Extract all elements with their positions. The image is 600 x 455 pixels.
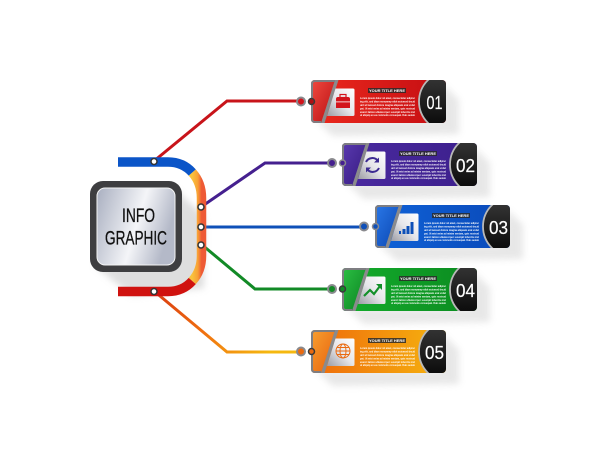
card 02 xyxy=(327,143,491,200)
shadow xyxy=(315,84,459,136)
body text: pat. Ut wisi enim ad minim veniam, quis nostrud xyxy=(424,232,479,236)
number: 04 xyxy=(456,280,475,301)
body text: exerci tation ullamcorper suscipit lobortis nisl xyxy=(424,235,479,239)
hub title: INFO xyxy=(122,206,155,227)
hub face xyxy=(97,188,175,265)
body text: ut aliquip ex ea commodo consequat. Duis autem xyxy=(360,363,415,367)
hub frame xyxy=(90,181,182,272)
connector nodes xyxy=(328,159,346,167)
number: 02 xyxy=(456,155,475,176)
card 01 xyxy=(296,80,460,137)
card body xyxy=(342,143,477,186)
connector nodes xyxy=(328,285,346,293)
card 03 xyxy=(359,205,524,262)
body text xyxy=(360,346,415,367)
icon: globe xyxy=(336,344,350,358)
body text xyxy=(391,284,446,305)
body text: pat. Ut wisi enim ad minim veniam, quis nostrud xyxy=(360,106,415,110)
shadow xyxy=(379,209,523,261)
body text: Lorem ipsum dolor sit amet, consectetur adipisc xyxy=(424,221,479,225)
shadow xyxy=(346,147,490,199)
body text: ut aliquip ex ea commodo consequat. Duis autem xyxy=(391,301,446,305)
body text: ing elit, sed diam nonummy nibh euismod tincid xyxy=(360,100,415,104)
body text: Lorem ipsum dolor sit amet, consectetur adipisc xyxy=(391,159,446,163)
body text: unt ut laoreet dolore magna aliquam erat volut xyxy=(360,103,415,107)
card 05 xyxy=(296,330,460,387)
connector lines xyxy=(154,101,364,352)
body text xyxy=(360,96,415,117)
icon: bar chart xyxy=(399,222,414,234)
shadow xyxy=(346,272,490,324)
body text xyxy=(391,159,446,180)
title pill: YOUR TITLE HERE xyxy=(369,338,405,343)
icon panel xyxy=(358,152,386,179)
connector nodes xyxy=(297,348,314,356)
icon panel xyxy=(327,338,354,366)
central hub: GRAPHIC xyxy=(105,228,167,250)
title pill: YOUR TITLE HERE xyxy=(433,213,469,218)
title pill: YOUR TITLE HERE xyxy=(400,276,436,281)
number: 01 xyxy=(426,92,442,113)
card body xyxy=(375,205,510,248)
arc: red segment xyxy=(118,281,192,292)
card body xyxy=(342,268,477,311)
body text: unt ut laoreet dolore magna aliquam erat volut xyxy=(391,291,446,295)
body text: pat. Ut wisi enim ad minim veniam, quis nostrud xyxy=(391,170,446,174)
hub shadow xyxy=(95,190,204,296)
body text: Lorem ipsum dolor sit amet, consectetur adipisc xyxy=(391,284,446,288)
connector nodes xyxy=(297,98,314,106)
number: 05 xyxy=(425,342,444,363)
card body xyxy=(311,80,446,123)
icon: refresh arrows xyxy=(366,158,379,172)
title pill: YOUR TITLE HERE xyxy=(369,88,405,93)
connector nodes xyxy=(360,222,378,230)
body text: Lorem ipsum dolor sit amet, consectetur adipisc xyxy=(360,96,415,100)
body text xyxy=(424,221,479,242)
number: 03 xyxy=(489,217,508,238)
body text: ing elit, sed diam nonummy nibh euismod tincid xyxy=(424,224,479,228)
arc: blue segment xyxy=(118,162,192,172)
body text: exerci tation ullamcorper suscipit lobortis nisl xyxy=(391,298,446,302)
icon: trend arrow xyxy=(364,284,382,296)
body text: unt ut laoreet dolore magna aliquam erat volut xyxy=(391,166,446,170)
body text: ing elit, sed diam nonummy nibh euismod tincid xyxy=(391,288,446,292)
title pill: YOUR TITLE HERE xyxy=(400,151,436,156)
body text: exerci tation ullamcorper suscipit lobortis nisl xyxy=(360,110,415,114)
central hub xyxy=(90,162,204,296)
body text: exerci tation ullamcorper suscipit lobortis nisl xyxy=(391,173,446,177)
body text: ing elit, sed diam nonummy nibh euismod tincid xyxy=(360,350,415,354)
body text: exerci tation ullamcorper suscipit lobortis nisl xyxy=(360,360,415,364)
body text: pat. Ut wisi enim ad minim veniam, quis nostrud xyxy=(391,294,446,298)
body text: ut aliquip ex ea commodo consequat. Duis autem xyxy=(360,113,415,117)
body text: Lorem ipsum dolor sit amet, consectetur adipisc xyxy=(360,346,415,350)
body text: pat. Ut wisi enim ad minim veniam, quis nostrud xyxy=(360,356,415,360)
icon panel xyxy=(391,214,418,241)
shadow xyxy=(315,334,459,386)
card 04 xyxy=(327,268,491,325)
body text: unt ut laoreet dolore magna aliquam erat volut xyxy=(424,228,479,232)
icon panel xyxy=(358,276,386,304)
body text: ut aliquip ex ea commodo consequat. Duis autem xyxy=(424,238,479,242)
body text: ut aliquip ex ea commodo consequat. Duis autem xyxy=(391,176,446,180)
icon: toolbox xyxy=(336,94,350,108)
icon panel xyxy=(327,88,354,116)
joint dots on arc xyxy=(151,158,204,294)
body text: ing elit, sed diam nonummy nibh euismod tincid xyxy=(391,162,446,166)
body text: unt ut laoreet dolore magna aliquam erat volut xyxy=(360,353,415,357)
arc: orange segment xyxy=(192,172,202,281)
card body xyxy=(311,330,446,373)
